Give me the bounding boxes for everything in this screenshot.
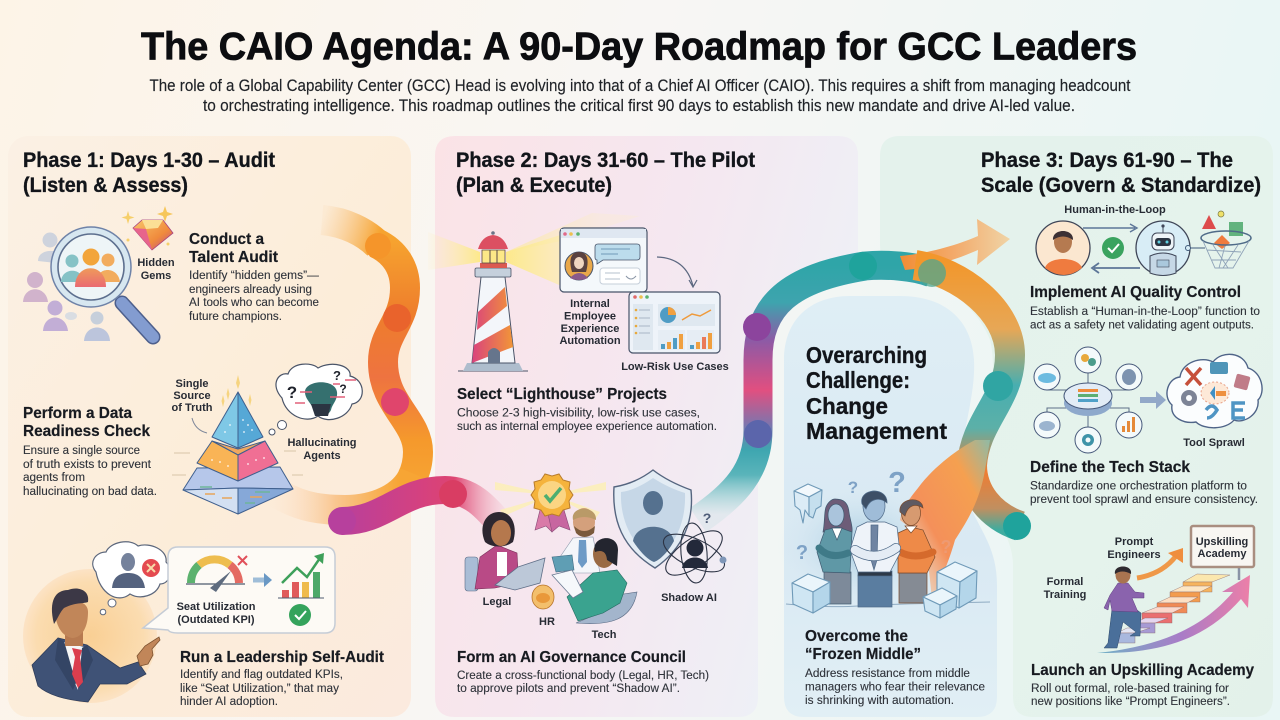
text block: define the tech stack: Standardize one orchestration platform to <box>1030 478 1247 492</box>
icon: hallucinating agent thought cloud <box>269 364 362 435</box>
label: formal training: Training <box>1044 589 1086 601</box>
text block: frozen middle <box>805 628 985 707</box>
text block: frozen middle: “Frozen Middle” <box>805 646 921 663</box>
icon: shadow AI atom <box>658 510 730 584</box>
heading: overarching challenge <box>806 342 947 444</box>
callout: seat utilization card <box>143 547 335 633</box>
text block: lighthouse projects: Choose 2-3 high-visibility, low-risk use cases, <box>457 406 700 420</box>
label: internal employee experience automation <box>559 298 621 347</box>
panel heading: phase 1: (Listen & Assess) <box>23 173 188 197</box>
text block: leadership self-audit: hinder AI adoption. <box>180 694 278 708</box>
icon: hallucinating agent thought cloud: ? <box>333 368 341 383</box>
icon: question marks <box>796 467 952 564</box>
panel heading: phase 1 <box>23 148 275 197</box>
icon: hidden gem with sparkles <box>122 206 173 250</box>
icon: upskilling academy sign: Academy <box>1198 548 1247 560</box>
text block: AI quality control: Implement AI Quality Control <box>1030 284 1241 301</box>
label: hallucinating agents <box>287 437 357 462</box>
gauge label: Seat Utilization <box>177 601 256 613</box>
text block: conduct a talent audit: Identify “hidden gems”— <box>189 268 320 282</box>
text block: conduct a talent audit: Talent Audit <box>189 249 278 266</box>
woman <box>817 499 852 604</box>
text block: upskilling academy: Launch an Upskilling Academy <box>1031 662 1254 679</box>
illustration: leader pointing <box>23 569 160 703</box>
heading: overarching challenge: Challenge: <box>806 367 910 393</box>
head and hair <box>65 628 83 646</box>
icon: lighthouse <box>458 231 528 371</box>
icon: approval medal <box>531 474 573 532</box>
text block: AI quality control: act as a safety net validating agent outputs. <box>1030 318 1254 332</box>
label: hidden gems <box>137 257 175 282</box>
cube: left <box>792 574 830 592</box>
panel heading: phase 2: (Plan & Execute) <box>456 173 612 197</box>
label: formal training <box>1044 576 1086 601</box>
label: single source of truth: Source <box>173 390 211 402</box>
icon: employee experience window <box>560 228 647 292</box>
icon: quality control basket with shapes <box>1201 211 1251 268</box>
lighthouse light beams <box>428 213 640 288</box>
panel: phase 1 background <box>8 136 411 717</box>
roadmap ribbon: magenta segment <box>328 480 505 535</box>
icon: people outside the lens <box>23 232 110 341</box>
side dashes and sparkles <box>172 451 303 475</box>
suit body <box>32 638 146 702</box>
label: hallucinating agents: Hallucinating <box>287 437 357 449</box>
text block: conduct a talent audit: future champions. <box>189 309 282 323</box>
roadmap ribbon: orange to teal segment <box>915 259 1031 540</box>
roadmap arrow to phase 3 <box>900 219 1010 270</box>
man in orange sweater <box>898 500 935 603</box>
tier: bottom <box>183 467 293 490</box>
label: internal employee experience automation: Experience <box>561 323 619 335</box>
label: legal: Legal <box>483 596 511 608</box>
label: shadow AI: Shadow AI <box>661 592 717 604</box>
person: manager with tablet <box>560 537 600 573</box>
label: hallucinating agents: Agents <box>303 450 341 462</box>
text block: AI governance council <box>457 649 709 695</box>
text block: frozen middle: managers who fear their relevance <box>805 680 985 694</box>
check <box>1102 237 1124 259</box>
text block: data readiness check: Perform a Data <box>23 405 132 422</box>
label: single source of truth: of Truth <box>172 402 213 414</box>
intro paragraph: The role of a Global Capability Center (GCC) Head is evolving into that of a Chief AI Officer (CAIO). This requires a shift from managing headcount <box>150 76 1131 95</box>
icon: hallucinating agent thought cloud: ? <box>339 382 347 396</box>
text block: conduct a talent audit: Conduct a <box>189 231 264 248</box>
text block: conduct a talent audit: AI tools who can become <box>189 295 319 309</box>
chairs <box>465 557 478 591</box>
text block: data readiness check: of truth exists to prevent <box>23 457 152 471</box>
label: single source of truth: Single <box>175 378 209 390</box>
decorative medal rays <box>495 482 606 518</box>
arrow: window to dashboard <box>657 257 697 287</box>
flames melting the ice <box>900 440 990 600</box>
text block: lighthouse projects: such as internal employee experience automation. <box>457 419 717 433</box>
arrow: rising gradient swoosh <box>1097 575 1250 653</box>
icon: climbing figure <box>1104 566 1144 648</box>
text block: AI governance council: Create a cross-functional body (Legal, HR, Tech) <box>457 668 709 682</box>
text block: lighthouse projects <box>457 386 717 433</box>
text block: frozen middle: Address resistance from middle <box>805 666 970 680</box>
tier: top <box>212 392 238 448</box>
title: The CAIO Agenda: A 90-Day Roadmap for GCC Leaders <box>141 26 1137 68</box>
text block: frozen middle: is shrinking with automation. <box>805 693 954 707</box>
label: internal employee experience automation: Employee <box>564 310 616 322</box>
label: formal training: Formal <box>1047 576 1083 588</box>
icon: question marks: ? <box>848 478 858 497</box>
label: hidden gems: Gems <box>141 270 171 282</box>
intro paragraph <box>150 76 1131 115</box>
icon: low-risk dashboard window <box>629 292 720 353</box>
gauge <box>191 559 239 583</box>
icon: ice cubes <box>792 484 977 618</box>
label: low-risk use cases: Low-Risk Use Cases <box>621 361 729 373</box>
central man <box>850 491 900 607</box>
label: tech: Tech <box>592 629 617 641</box>
text block: leadership self-audit: Identify and flag outdated KPIs, <box>180 667 343 681</box>
illustration: frozen middle managers <box>786 491 990 607</box>
icon: training staircase <box>1117 574 1230 643</box>
text block: define the tech stack: prevent tool sprawl and ensure consistency. <box>1030 492 1258 506</box>
text block: lighthouse projects: Select “Lighthouse” Projects <box>457 386 667 403</box>
tier: middle <box>212 441 265 455</box>
label: single source of truth <box>172 378 213 433</box>
label: hidden gems: Hidden <box>137 257 175 269</box>
loop arrows <box>1083 224 1137 232</box>
text block: data readiness check: agents from <box>23 470 85 484</box>
cube: right <box>937 562 977 582</box>
text block: upskilling academy: Roll out formal, role-based training for <box>1031 681 1229 695</box>
illustration: human and robot loop <box>1036 221 1205 276</box>
icon: magnifying glass over talent group <box>23 227 153 341</box>
label: internal employee experience automation: Internal <box>570 298 610 310</box>
laptop <box>495 558 545 590</box>
cube: hanging with icicles <box>794 484 822 497</box>
illustration: governance council meeting <box>465 508 637 624</box>
icon: shadow AI atom: ? <box>703 510 711 526</box>
text block: leadership self-audit: Run a Leadership Self-Audit <box>180 649 384 666</box>
text block: AI quality control <box>1030 284 1260 332</box>
text block: AI governance council: to approve pilots and prevent “Shadow AI”. <box>457 681 680 695</box>
label: internal employee experience automation: Automation <box>559 335 621 347</box>
brain icon <box>532 585 554 609</box>
arrow: hub to tool sprawl <box>1140 391 1166 409</box>
label: prompt engineers: Engineers <box>1107 549 1161 561</box>
panel heading: phase 2: Phase 2: Days 31-60 – The Pilot <box>456 148 755 172</box>
shirt and collar <box>60 641 84 690</box>
cube: front <box>923 588 957 605</box>
text block: AI governance council: Form an AI Governance Council <box>457 649 686 666</box>
heading: overarching challenge: Management <box>806 418 947 444</box>
label: tool sprawl: Tool Sprawl <box>1183 437 1245 449</box>
text block: data readiness check: hallucinating on bad data. <box>23 484 157 498</box>
person: tech <box>567 570 627 621</box>
label: prompt engineers <box>1107 536 1161 561</box>
panel heading: phase 1: Phase 1: Days 1-30 – Audit <box>23 148 275 172</box>
icon: upskilling academy sign: Upskilling <box>1196 536 1248 548</box>
label: prompt engineers: Prompt <box>1115 536 1154 548</box>
red tie <box>72 648 83 688</box>
label: human-in-the-loop: Human-in-the-Loop <box>1064 204 1166 216</box>
text block: frozen middle: Overcome the <box>805 628 908 645</box>
intro paragraph: to orchestrating intelligence. This roadmap outlines the critical first 90 days to establish this new mandate and drive AI-led value. <box>203 96 1075 115</box>
roadmap ribbon: orange segment <box>272 220 418 510</box>
icon: upskilling academy sign <box>1191 526 1254 580</box>
panel: phase 3 background <box>880 136 1273 717</box>
icon: question marks: ? <box>940 537 952 557</box>
text block: define the tech stack <box>1030 459 1258 506</box>
illustration: shield with shadow figure <box>614 470 692 568</box>
text block: data readiness check: Readiness Check <box>23 423 150 440</box>
arrow: orange growth arrow <box>1137 548 1183 578</box>
icon: hallucinating agent thought cloud: ? <box>287 383 297 402</box>
bar chart <box>278 553 324 598</box>
person: legal <box>475 545 518 589</box>
panel: overarching challenge background <box>784 296 997 717</box>
label: HR: HR <box>539 616 555 628</box>
text block: define the tech stack: Define the Tech Stack <box>1030 459 1190 476</box>
diagram: orchestration platform hub <box>1034 347 1142 453</box>
panel: phase 2 background <box>435 136 858 717</box>
text block: AI quality control: Establish a “Human-in-the-Loop” function to <box>1030 304 1260 318</box>
icon: question marks: ? <box>888 467 906 499</box>
roadmap ribbon: teal segment <box>698 252 932 520</box>
icon: data pyramid <box>172 375 303 514</box>
illustration: frost background <box>777 483 947 607</box>
heading: overarching challenge: Overarching <box>806 342 927 368</box>
text block: conduct a talent audit <box>189 231 320 323</box>
text block: data readiness check: Ensure a single source <box>23 443 140 457</box>
text block: upskilling academy: new positions like “Prompt Engineers”. <box>1031 694 1230 708</box>
text block: upskilling academy <box>1031 662 1254 708</box>
panel heading: phase 3: Phase 3: Days 61-90 – The <box>981 148 1233 172</box>
text block: leadership self-audit <box>180 649 384 708</box>
text block: data readiness check <box>23 405 157 498</box>
data dots <box>211 419 265 467</box>
text block: conduct a talent audit: engineers already using <box>189 282 312 296</box>
panel heading: phase 3 <box>981 148 1261 197</box>
human <box>1036 221 1090 275</box>
callout: seat utilization card: (Outdated KPI) <box>178 614 255 626</box>
pointing hand <box>137 637 160 666</box>
icon: thought cloud with crossed-out manager <box>93 542 170 615</box>
text block: leadership self-audit: like “Seat Utilization,” that may <box>180 681 340 695</box>
icon: people inside the lens <box>61 248 120 287</box>
heading: overarching challenge: Change <box>806 393 888 419</box>
icon: question marks: ? <box>796 542 808 564</box>
panel heading: phase 2 <box>456 148 755 197</box>
robot <box>1136 221 1190 275</box>
panel heading: phase 3: Scale (Govern & Standardize) <box>981 173 1261 197</box>
icon: tool sprawl cloud <box>1167 354 1262 428</box>
arrow <box>253 578 265 582</box>
